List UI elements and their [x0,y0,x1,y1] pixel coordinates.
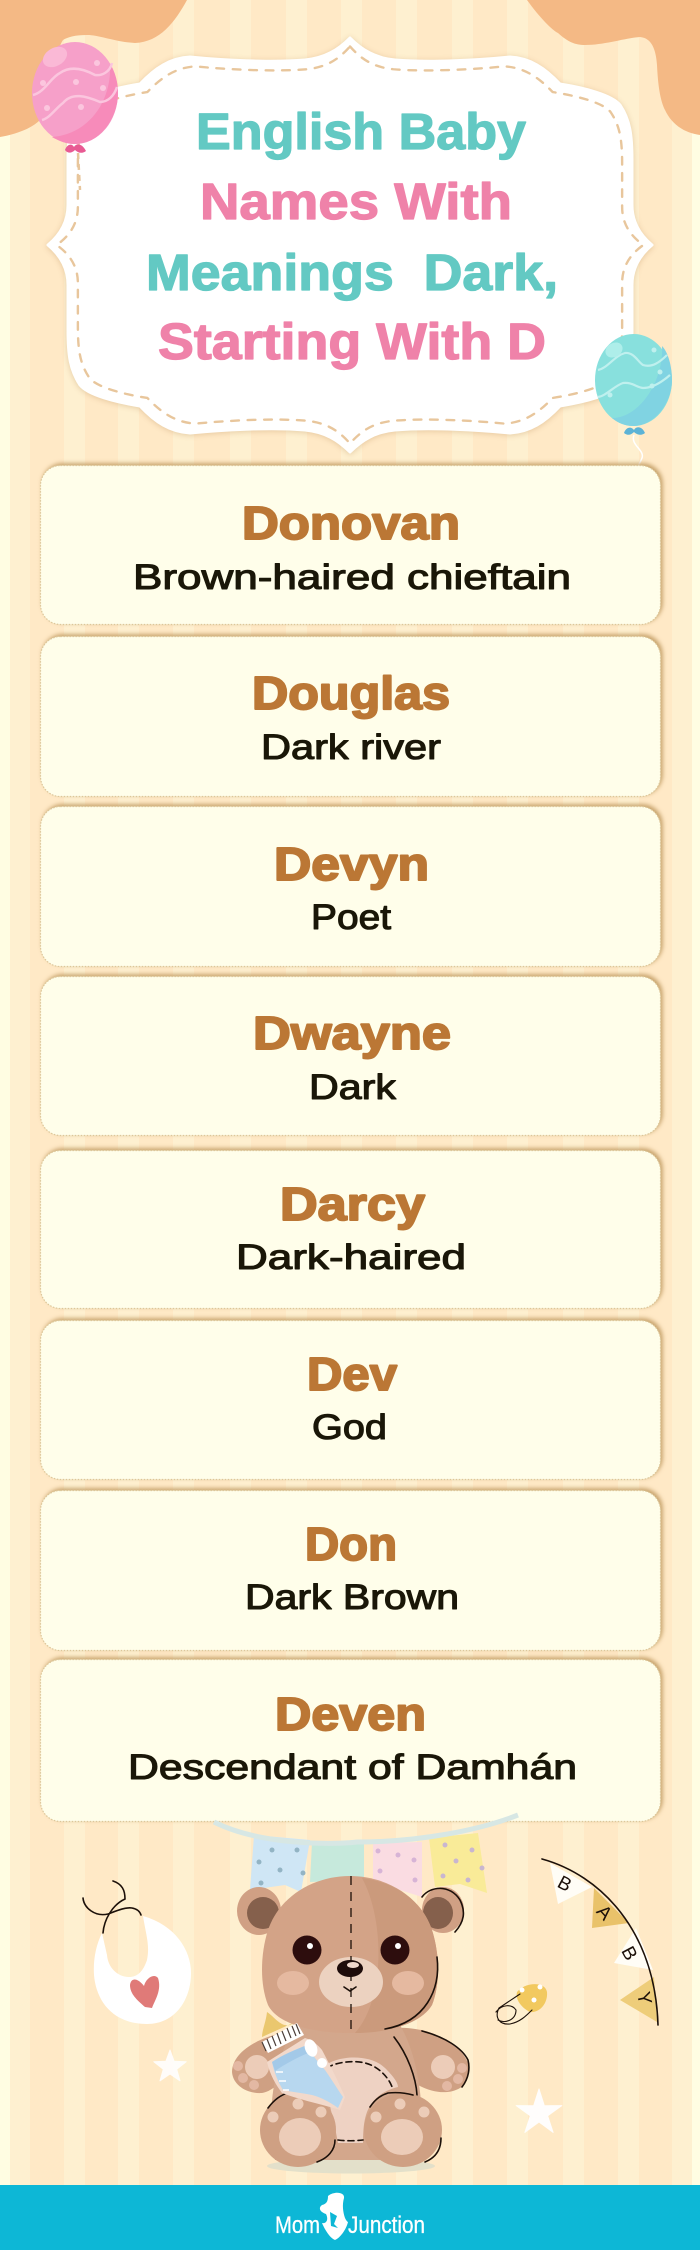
title: Meanings Dark, [146,244,558,301]
panel: Devyn: Poet [311,898,391,937]
icon: baby banner [542,1859,658,2025]
title: English Baby [196,103,527,160]
panel: Don: Don [305,1518,397,1570]
MomJunction logo: Mom [275,2212,320,2239]
bear body [271,2025,422,2160]
bear bottle [262,2012,345,2110]
panel: Don [40,1490,660,1650]
panel: Deven: Deven [275,1688,426,1740]
illustration: teddy bear [232,1876,469,2174]
panel: Darcy [40,1150,660,1308]
icon: baby banner: Y [632,1990,655,2007]
title: Names With [200,173,512,230]
bear feet [260,2093,442,2167]
panel: Deven: Descendant of Damhán [128,1748,577,1787]
panel: Donovan: Brown-haired chieftain [133,558,571,597]
icon: teal balloon [595,334,672,470]
panel: Donovan [40,466,660,624]
panel: Dev: Dev [307,1348,397,1400]
panel: Dwayne: Dwayne [253,1007,451,1059]
icon: safety pin [496,1984,547,2024]
bear head [262,1876,438,2033]
title [146,103,558,370]
bear ears [237,1887,464,1935]
panel: Darcy: Dark-haired [236,1238,466,1277]
panel: Douglas: Dark river [261,728,441,767]
panel: Dev [40,1320,660,1480]
panel: Douglas: Douglas [252,667,450,719]
icon: baby banner: B [616,1943,641,1964]
icon: baby banner: A [592,1901,616,1925]
bear arms [232,2028,469,2093]
bunting flags [214,1815,518,1897]
panel: Donovan: Donovan [242,497,460,549]
footer bar [0,2185,700,2250]
balloon string over plaque [78,153,80,190]
title plaque [48,38,652,452]
title: Starting With D [158,313,546,370]
icon: star left [154,2050,186,2081]
icon: star right [516,2089,562,2132]
right top drape [527,0,700,135]
panel: Dwayne [40,976,660,1136]
icon: baby banner: B [554,1872,575,1897]
panel: Dev: God [312,1408,387,1447]
icon: pink balloon [32,42,118,153]
panel: Don: Dark Brown [245,1578,459,1617]
panel: Darcy: Darcy [280,1178,425,1230]
panel: Deven [40,1660,660,1822]
icon: bib [83,1881,191,2024]
bear ground shadow [267,2158,435,2174]
panel: Douglas [40,636,660,796]
panel: Dwayne: Dark [309,1068,397,1107]
left top drape [0,0,187,137]
panel: Devyn: Devyn [274,838,429,890]
MomJunction logo: Junction [348,2212,425,2239]
panel: Devyn [40,806,660,966]
MomJunction logo [275,2193,425,2240]
